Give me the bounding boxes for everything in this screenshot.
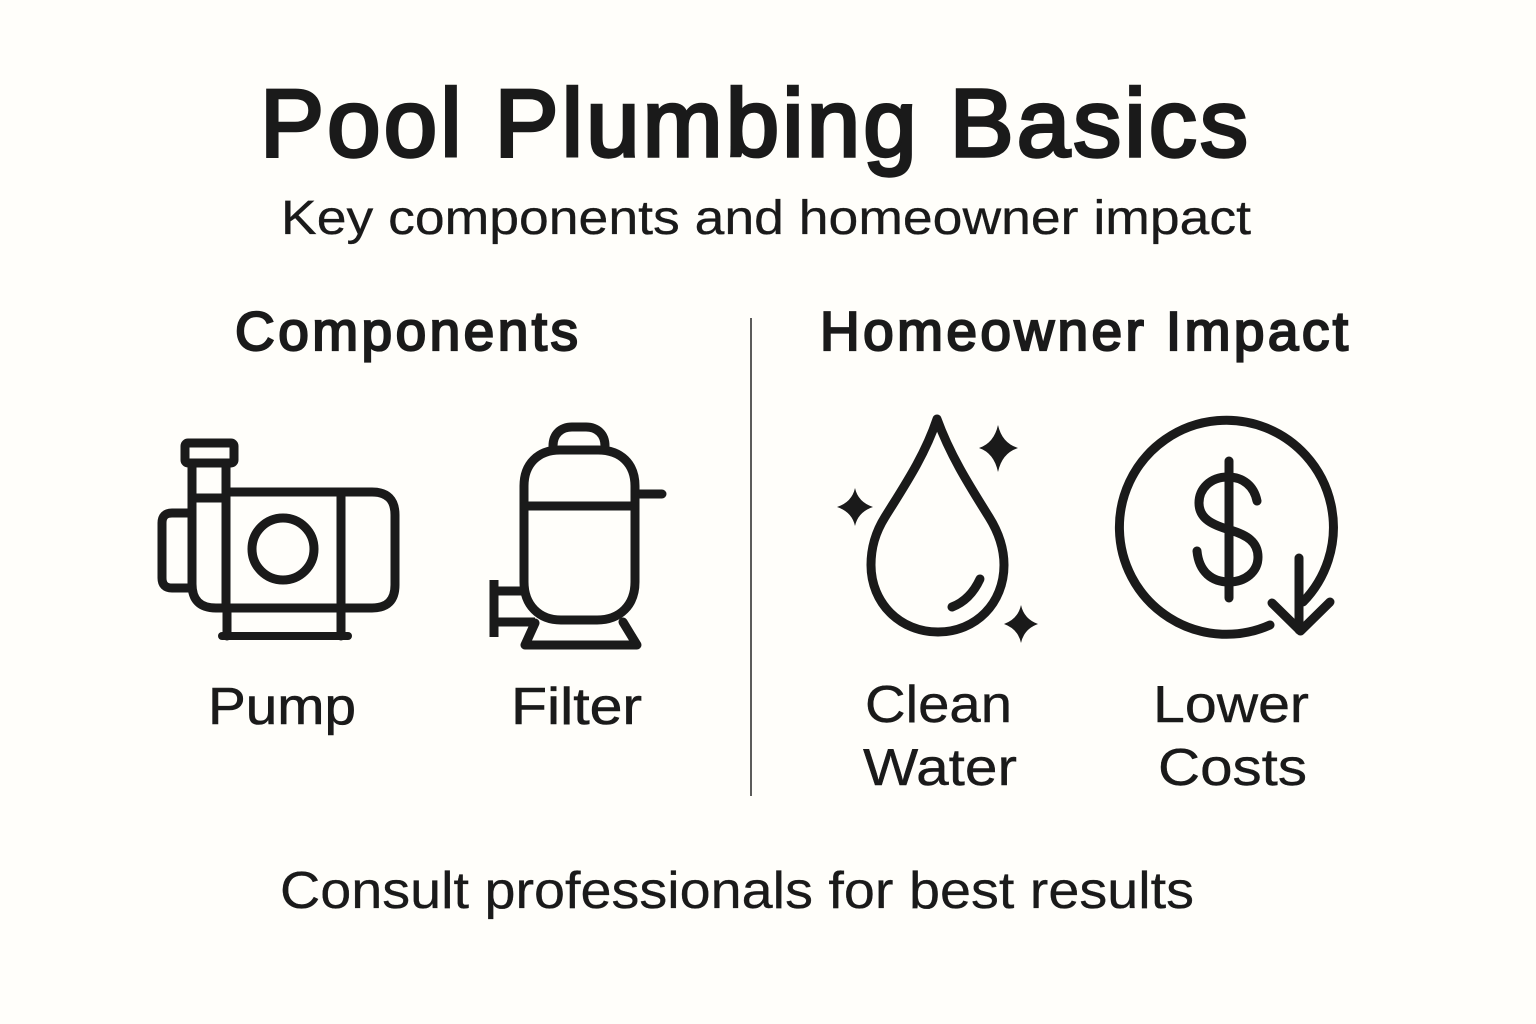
- label: clean water: Water: [863, 739, 1017, 797]
- label: filter: Filter: [511, 678, 642, 736]
- icon: pump: [162, 443, 395, 636]
- footer note: Consult professionals for best results: [280, 862, 1194, 920]
- heading: homeowner impact: Homeowner Impact: [820, 300, 1348, 362]
- label: lower costs: [1153, 676, 1309, 797]
- icon: filter: [494, 427, 662, 645]
- heading: components: Components: [235, 300, 578, 362]
- icon: clean water drop: [837, 419, 1038, 643]
- label: lower costs: Lower: [1153, 676, 1309, 734]
- divider: [750, 318, 752, 796]
- icon: lower costs dollar: [1119, 420, 1333, 634]
- title: Pool Plumbing Basics: [260, 70, 1248, 177]
- label: clean water: Clean: [865, 676, 1012, 734]
- label: clean water: [863, 676, 1017, 797]
- subtitle: Key components and homeowner impact: [281, 192, 1251, 245]
- label: lower costs: Costs: [1158, 739, 1307, 797]
- label: pump: Pump: [208, 678, 356, 736]
